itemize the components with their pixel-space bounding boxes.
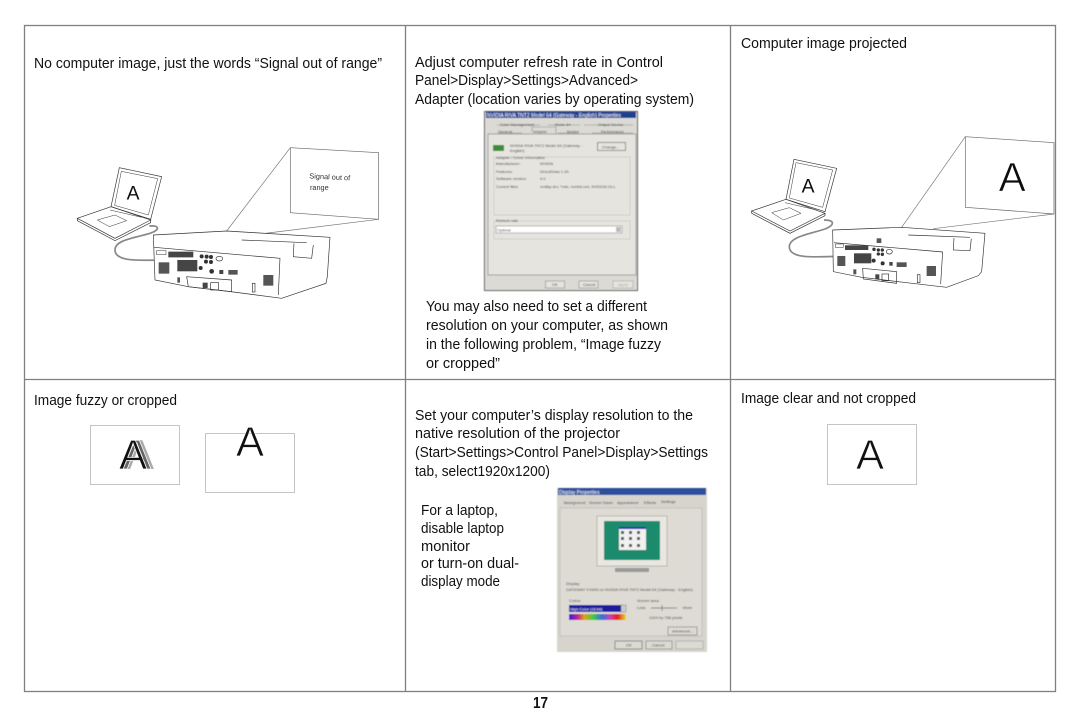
screenshot: display properties dialog: Less	[637, 605, 645, 610]
example: fuzzy image: A	[119, 431, 147, 478]
instruction: adjust refresh rate	[415, 55, 694, 108]
screenshot: adapter properties dialog: Performance	[601, 129, 625, 134]
screenshot: display properties dialog: Display Properties	[559, 490, 600, 496]
screenshot: adapter properties dialog: Adapter / Driver information	[496, 155, 545, 160]
screenshot: display properties dialog: Cancel	[652, 642, 665, 648]
example: fuzzy image	[90, 426, 180, 484]
screenshot: adapter properties dialog: Features:	[496, 169, 513, 174]
projected screen: signal out of range: range	[310, 183, 329, 192]
example: clear image: A	[856, 431, 884, 478]
screenshot: adapter properties dialog: NVIDIA RIVA TNT2 Model 64 (Gateway -	[510, 143, 583, 148]
screenshot: display properties dialog: GATEWAY VX900 on NVIDIA RIVA TNT2 Model 64 (Gateway - English)	[566, 587, 694, 592]
note: different resolution: or cropped”	[426, 356, 500, 372]
screenshot: display properties dialog	[557, 488, 707, 652]
screenshot: display properties dialog: OK	[626, 642, 632, 648]
screenshot: adapter properties dialog: Refresh rate	[496, 218, 519, 223]
example: cropped image: A	[236, 418, 264, 465]
projected screen: signal out of range: Signal out of	[309, 171, 351, 183]
cable	[789, 220, 843, 257]
screenshot: adapter properties dialog: Current files:	[496, 184, 519, 189]
screenshot: adapter properties dialog: Manufacturer:	[496, 161, 521, 166]
page number: 17	[533, 695, 548, 712]
screenshot: adapter properties dialog: Color Management	[500, 122, 535, 127]
instruction: set display resolution	[415, 408, 708, 480]
screenshot: adapter properties dialog	[484, 112, 638, 290]
screenshot: adapter properties dialog: Software version:	[496, 176, 527, 181]
screenshot: adapter properties dialog: General	[498, 129, 512, 134]
example: clear image	[828, 424, 916, 484]
screenshot: adapter properties dialog: Mode 64	[555, 122, 571, 127]
laptop: A	[802, 176, 815, 197]
screenshot: display properties dialog: Colors	[569, 598, 581, 603]
screenshot: adapter properties dialog: nvdisp.drv, *vdd, nvmini.vxd, NVDD32.DLL	[540, 184, 617, 189]
illustration: laptop connected to projector, signal out of range	[77, 148, 379, 298]
note: laptop instructions	[421, 503, 519, 590]
heading: image fuzzy or cropped: Image fuzzy or cropped	[34, 393, 177, 409]
screenshot: display properties dialog: Screen Saver	[589, 500, 614, 505]
laptop	[77, 168, 162, 241]
projected screen: letter A	[902, 137, 1054, 229]
instruction: adjust refresh rate: Panel>Display>Settings>Advanced>	[415, 73, 638, 89]
instruction: set display resolution: native resolution of the projector	[415, 426, 620, 442]
screenshot: display properties dialog: Appearance	[617, 500, 639, 505]
instruction: set display resolution: Set your computer’s display resolution to the	[415, 408, 693, 424]
cable	[115, 226, 170, 260]
heading: no computer image: No computer image, just the words “Signal out of range”	[34, 56, 382, 72]
note: laptop instructions: For a laptop,	[421, 503, 498, 519]
projected screen: signal out of range	[227, 148, 379, 234]
screenshot: adapter properties dialog: 4.0	[540, 176, 546, 181]
screenshot: adapter properties dialog: Modes	[567, 129, 579, 134]
note: laptop instructions: monitor	[421, 539, 470, 555]
screenshot: adapter properties dialog: NVIDIA RIVA TNT2 Model 64 (Gateway - English) Properties	[487, 113, 622, 119]
screenshot: adapter properties dialog: Cancel	[583, 282, 596, 287]
note: different resolution: You may also need to set a different	[426, 299, 647, 315]
example: fuzzy image: A	[126, 431, 154, 478]
heading: image clear and not cropped: Image clear and not cropped	[741, 391, 916, 407]
projector	[833, 227, 985, 287]
screenshot: adapter properties dialog: OK	[552, 282, 558, 287]
instruction: adjust refresh rate: Adapter (location varies by operating system)	[415, 92, 694, 108]
instruction: set display resolution: (Start>Settings>Control Panel>Display>Settings	[415, 445, 708, 461]
screenshot: adapter properties dialog: DirectDraw 1.00	[540, 169, 569, 174]
projector	[153, 231, 330, 298]
note: laptop instructions: display mode	[421, 574, 500, 590]
laptop: A	[127, 183, 140, 204]
screenshot: display properties dialog: Background	[564, 500, 585, 505]
screenshot: adapter properties dialog: Optimal	[497, 228, 511, 232]
screenshot: display properties dialog: Effects	[644, 500, 656, 505]
instruction: set display resolution: tab, select1920x1200)	[415, 464, 550, 480]
screenshot: display properties dialog: Settings	[661, 499, 675, 504]
screenshot: adapter properties dialog: Change...	[602, 144, 619, 150]
example: fuzzy image: A	[123, 431, 151, 478]
screenshot: display properties dialog: Screen area	[637, 598, 660, 603]
screenshot: display properties dialog: 1024 by 768 pixels	[649, 615, 682, 620]
example: cropped image	[206, 418, 294, 492]
screenshot: adapter properties dialog: NVIDIA	[540, 161, 554, 166]
note: different resolution	[426, 299, 668, 372]
note: different resolution: in the following problem, “Image fuzzy	[426, 337, 662, 353]
instruction: adjust refresh rate: Adjust computer refresh rate in Control	[415, 55, 663, 71]
projected screen: letter A: A	[999, 154, 1027, 200]
screenshot: display properties dialog: High Color (16 bit)	[570, 606, 603, 612]
laptop	[752, 159, 837, 233]
screenshot: adapter properties dialog: Output Device	[598, 122, 624, 127]
note: laptop instructions: disable laptop	[421, 521, 504, 537]
note: laptop instructions: or turn-on dual-	[421, 556, 519, 572]
note: different resolution: resolution on your computer, as shown	[426, 318, 668, 334]
heading: computer image projected: Computer image projected	[741, 36, 907, 52]
illustration: laptop connected to projector, image projected	[752, 137, 1054, 287]
screenshot: adapter properties dialog: Apply	[618, 282, 628, 287]
screenshot: adapter properties dialog: Adapter	[533, 129, 548, 134]
screenshot: adapter properties dialog: English)	[510, 148, 525, 153]
screenshot: display properties dialog: More	[683, 605, 693, 610]
screenshot: display properties dialog: Advanced...	[672, 628, 693, 634]
screenshot: display properties dialog: Display:	[566, 581, 580, 586]
